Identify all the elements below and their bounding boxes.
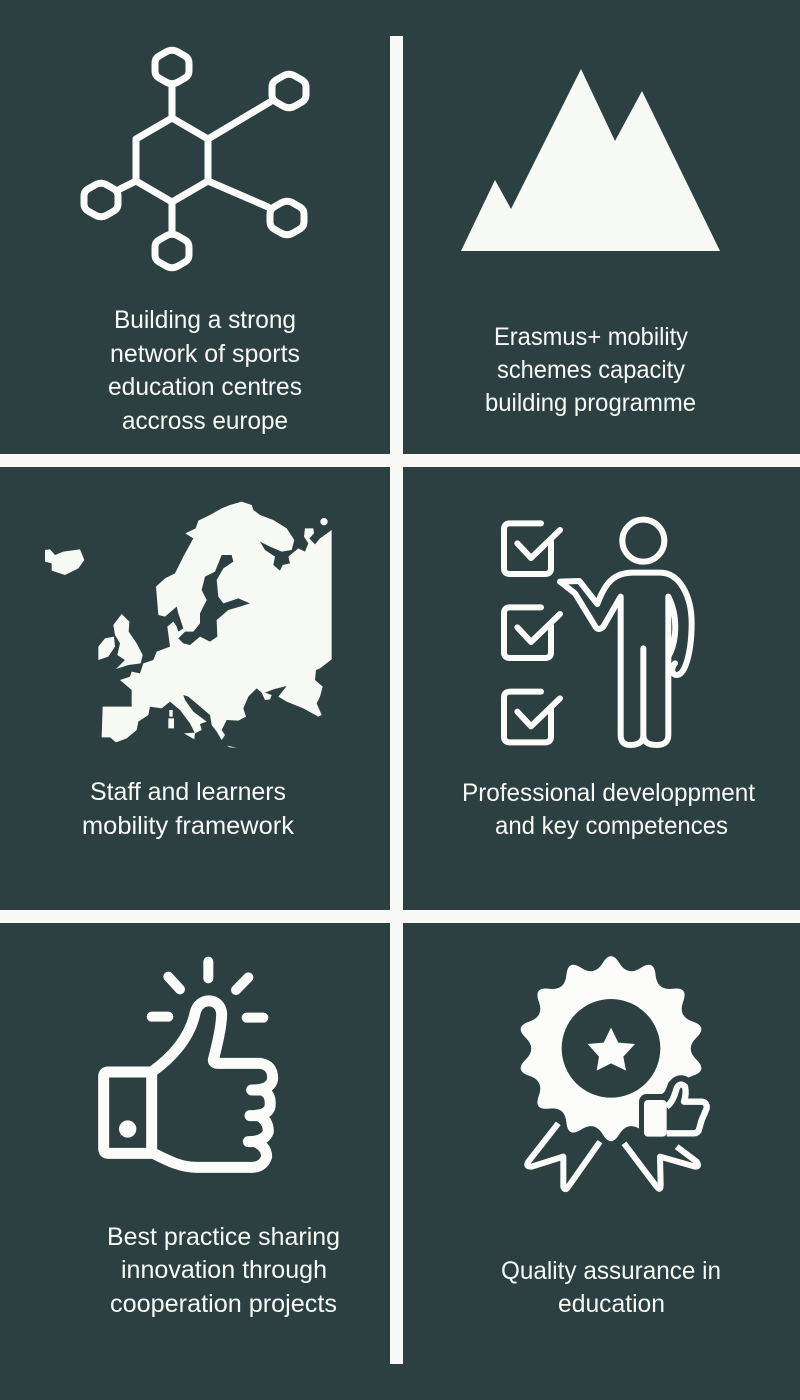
text: Erasmus caption: building programme [485,389,696,417]
icon: person with checklist [504,520,692,745]
text: mobility caption: mobility framework [82,812,295,840]
text: best practice caption: innovation through [121,1256,327,1284]
text: network caption: Building a strong [114,306,296,334]
panel: Erasmus+ capacity building [461,69,720,417]
text: quality assurance caption: Quality assurance in [501,1257,721,1285]
icon: network hexagons [84,50,306,268]
icon: map of Europe [45,502,332,748]
text: Erasmus caption: Erasmus+ mobility [494,323,688,351]
panel: mobility framework [45,502,332,840]
text: mobility caption [82,778,295,840]
text: professional development caption: and key competences [495,812,728,840]
text: quality assurance caption [501,1257,721,1318]
panel: network of education centres [84,50,306,435]
text: professional development caption [462,779,755,840]
text: network caption [108,306,302,435]
panel: professional development [462,520,755,840]
icon: award rosette [521,956,707,1189]
text: network caption: accross europe [122,407,288,435]
panel: quality assurance [501,956,721,1318]
text: best practice caption [107,1223,340,1318]
text: network caption: network of sports [110,340,300,368]
icon: mountain [461,69,720,251]
panel: best practice sharing [104,962,340,1318]
text: professional development caption: Professional developpment [462,779,755,807]
text: Erasmus caption [485,323,696,417]
text: best practice caption: Best practice sharing [107,1223,340,1251]
text: Erasmus caption: schemes capacity [497,356,685,384]
text: best practice caption: cooperation projects [110,1290,337,1318]
icon: thumbs up [104,962,273,1167]
text: quality assurance caption: education [558,1290,665,1318]
text: network caption: education centres [108,373,302,401]
text: mobility caption: Staff and learners [90,778,286,806]
